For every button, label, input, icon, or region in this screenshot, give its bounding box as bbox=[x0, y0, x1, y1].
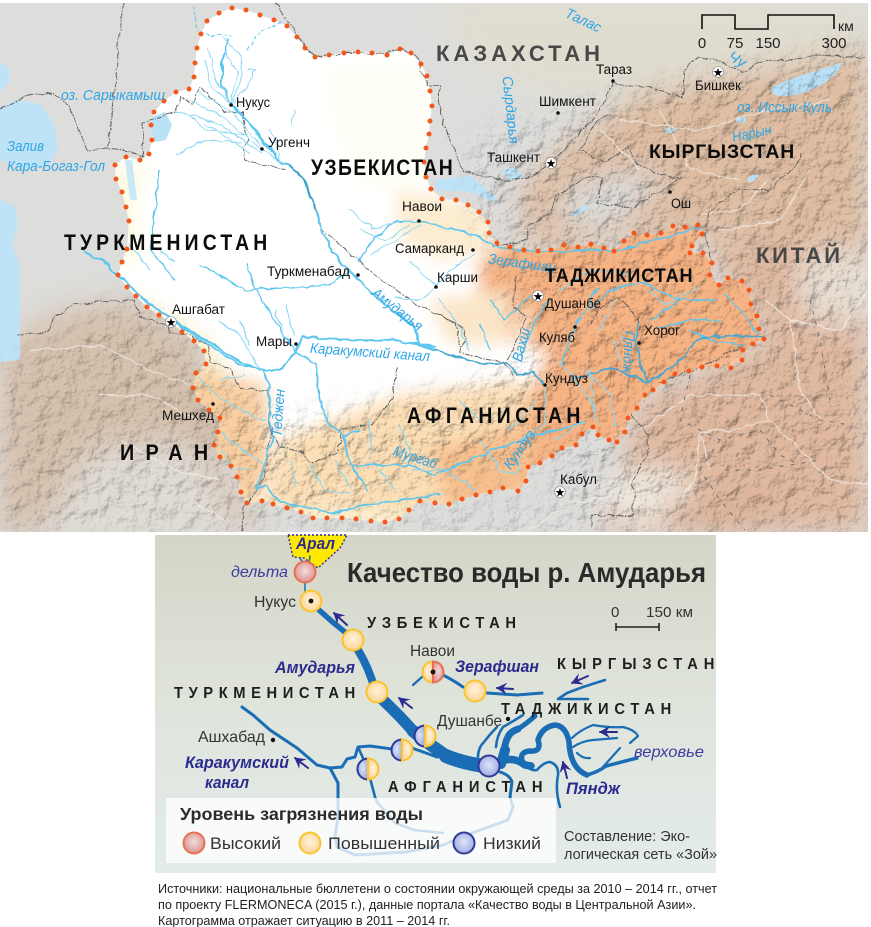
schematic labels bbox=[174, 564, 714, 798]
scale bar: schematic: 150 км bbox=[646, 604, 693, 621]
basin area bbox=[100, 0, 790, 530]
Turkmen rivers bbox=[150, 170, 350, 352]
schematic labels: Нукус bbox=[254, 594, 296, 611]
river and lake labels: Пяндж bbox=[619, 331, 637, 374]
scale bar: schematic: 0 bbox=[611, 604, 619, 621]
country labels: ТАДЖИКИСТАН bbox=[545, 265, 693, 287]
city markers bbox=[211, 79, 672, 406]
Tajik tributaries bbox=[501, 750, 505, 764]
city labels: Кабул bbox=[560, 472, 597, 487]
river and lake labels: Теджен bbox=[269, 389, 289, 438]
credit: логическая сеть «Зой» bbox=[564, 847, 717, 863]
Vakhsh and Tajik tributaries bbox=[480, 282, 758, 362]
schematic labels: Зерафшан bbox=[455, 658, 539, 676]
schematic labels: ТУРКМЕНИСТАН bbox=[174, 684, 355, 702]
capital markers bbox=[166, 66, 724, 500]
city labels: Ош bbox=[671, 196, 691, 211]
schematic labels: Амударья bbox=[274, 659, 355, 677]
terrain shading bbox=[0, 3, 868, 532]
city labels: Шимкент bbox=[539, 94, 596, 109]
city labels bbox=[162, 62, 741, 487]
country labels: КАЗАХСТАН bbox=[436, 41, 600, 66]
river and lake labels: Талас bbox=[562, 6, 604, 37]
schematic labels: УЗБЕКИСТАН bbox=[367, 614, 516, 632]
capital markers: ★ bbox=[713, 66, 723, 80]
scale bar: top map: 0 bbox=[698, 35, 706, 52]
terrain background bbox=[0, 0, 871, 535]
schematic labels: Пяндж bbox=[566, 780, 621, 798]
river and lake labels: Мургаб bbox=[391, 443, 440, 473]
river and lake labels bbox=[7, 6, 832, 473]
schematic labels: Ашхабад bbox=[198, 729, 266, 746]
city labels: Ашгабат bbox=[172, 302, 225, 317]
capital markers: ★ bbox=[533, 290, 543, 304]
Zerafshan bbox=[443, 675, 463, 687]
capital markers: ★ bbox=[546, 156, 556, 170]
river and lake labels: Амударья bbox=[368, 285, 426, 335]
title: Качество воды р. Амударья bbox=[347, 557, 706, 588]
river network bbox=[242, 556, 638, 855]
Zerafshan and Kashkadarya bbox=[358, 221, 700, 262]
source notes: Источники: национальные бюллетени о состоянии окружающей среды за 2010 – 2014 гг., отчет bbox=[158, 882, 717, 896]
city labels: Карши bbox=[437, 270, 478, 285]
Aral Sea bbox=[288, 535, 347, 568]
flow arrows bbox=[295, 613, 617, 778]
city labels: Туркменабад bbox=[267, 264, 350, 279]
river and lake labels: Зерафшан bbox=[487, 251, 557, 277]
credit: Составление: Эко- bbox=[564, 829, 690, 845]
international borders bbox=[0, 3, 865, 532]
city labels: Нукус bbox=[236, 95, 270, 110]
scale bar: top map: 75 bbox=[727, 35, 743, 52]
scale bar: top map: 150 bbox=[755, 35, 781, 52]
country labels: КЫРГЫЗСТАН bbox=[649, 141, 794, 163]
river and lake labels: Залив bbox=[7, 139, 44, 155]
capital markers: ★ bbox=[166, 316, 176, 330]
Pyanj bbox=[498, 759, 531, 766]
Aral Sea: Арал bbox=[295, 535, 335, 553]
Tedzhen bbox=[175, 322, 440, 513]
Amu Darya channel bbox=[300, 556, 310, 592]
water bodies bbox=[0, 62, 842, 362]
schematic labels: Душанбе bbox=[437, 713, 502, 730]
schematic labels: ТАДЖИКИСТАН bbox=[501, 700, 671, 718]
country labels: ИРАН bbox=[120, 441, 208, 465]
city labels: Кундуз bbox=[545, 371, 588, 386]
city labels: Душанбе bbox=[545, 296, 601, 311]
Karakum canal bbox=[85, 252, 435, 371]
credit bbox=[564, 829, 717, 863]
disputed borders bbox=[680, 300, 850, 530]
Amu Darya delta bbox=[175, 38, 295, 165]
monitoring points bbox=[294, 562, 500, 780]
schematic labels: канал bbox=[205, 774, 249, 792]
scale bar: top map bbox=[698, 15, 854, 52]
country labels: УЗБЕКИСТАН bbox=[311, 156, 453, 180]
river and lake labels: Каракумский канал bbox=[310, 341, 430, 365]
country labels bbox=[64, 41, 840, 465]
city labels: Хорог bbox=[644, 323, 680, 338]
schematic labels: дельта bbox=[231, 564, 288, 581]
minor drainage lines on terrain bbox=[30, 100, 868, 530]
river and lake labels: оз. Сарыкамыш bbox=[61, 88, 165, 104]
city labels: Ургенч bbox=[268, 135, 310, 150]
legend: water pollution level: Высокий bbox=[210, 834, 281, 853]
country labels: КИТАЙ bbox=[756, 243, 840, 268]
panel: relief map of the Amu Darya basin bbox=[0, 0, 871, 535]
panel: water quality schematic bbox=[155, 535, 717, 873]
source notes bbox=[158, 882, 717, 927]
legend: water pollution level: Повышенный bbox=[328, 834, 440, 853]
river and lake labels: Нарын bbox=[731, 122, 773, 146]
river and lake labels: Кара-Богаз-Гол bbox=[7, 159, 105, 175]
Pyanj bbox=[435, 323, 763, 385]
legend: water pollution level bbox=[166, 798, 556, 863]
city labels: Бишкек bbox=[695, 78, 741, 93]
scale bar: top map: км bbox=[838, 18, 854, 34]
rivers of the basin bbox=[85, 6, 763, 513]
legend: water pollution level: Низкий bbox=[483, 834, 541, 853]
country labels: АФГАНИСТАН bbox=[407, 404, 580, 428]
capital markers: ★ bbox=[555, 486, 565, 500]
scale bar: top map: 300 bbox=[821, 35, 847, 52]
river and lake labels: Чу bbox=[725, 48, 750, 72]
Amu Darya main channel bbox=[222, 40, 435, 350]
schematic labels: Навои bbox=[410, 643, 455, 660]
legend: water pollution level: Уровень загрязнения воды bbox=[180, 804, 423, 824]
Murgab bbox=[295, 352, 585, 490]
city labels: Навои bbox=[402, 199, 442, 214]
river and lake labels: Вахш bbox=[510, 327, 534, 363]
city labels: Мешхед bbox=[162, 408, 214, 423]
river and lake labels: Кундуз bbox=[501, 427, 539, 473]
schematic labels: Каракумский bbox=[185, 754, 289, 772]
Karakum canal bbox=[242, 707, 392, 768]
source notes: по проекту FLERMONECA (2015 г.), данные портала «Качество воды в Центральной Азии». bbox=[158, 898, 696, 912]
city labels: Тараз bbox=[596, 62, 632, 77]
city labels: Ташкент bbox=[487, 150, 540, 165]
schematic labels: КЫРГЫЗСТАН bbox=[557, 655, 714, 673]
schematic labels: АФГАНИСТАН bbox=[388, 778, 543, 796]
country labels: ТУРКМЕНИСТАН bbox=[64, 231, 267, 255]
Kunduz branch bbox=[330, 768, 513, 855]
scale bar: schematic bbox=[611, 604, 693, 631]
city labels: Куляб bbox=[539, 330, 575, 345]
river and lake labels: Сырдарья bbox=[498, 75, 522, 145]
basin boundary: dotted orange line bbox=[115, 8, 764, 522]
city labels: Самарканд bbox=[395, 241, 464, 256]
schematic labels: верховье bbox=[634, 744, 704, 761]
river and lake labels: оз. Иссык-Куль bbox=[737, 100, 832, 116]
city labels: Мары bbox=[256, 334, 292, 349]
